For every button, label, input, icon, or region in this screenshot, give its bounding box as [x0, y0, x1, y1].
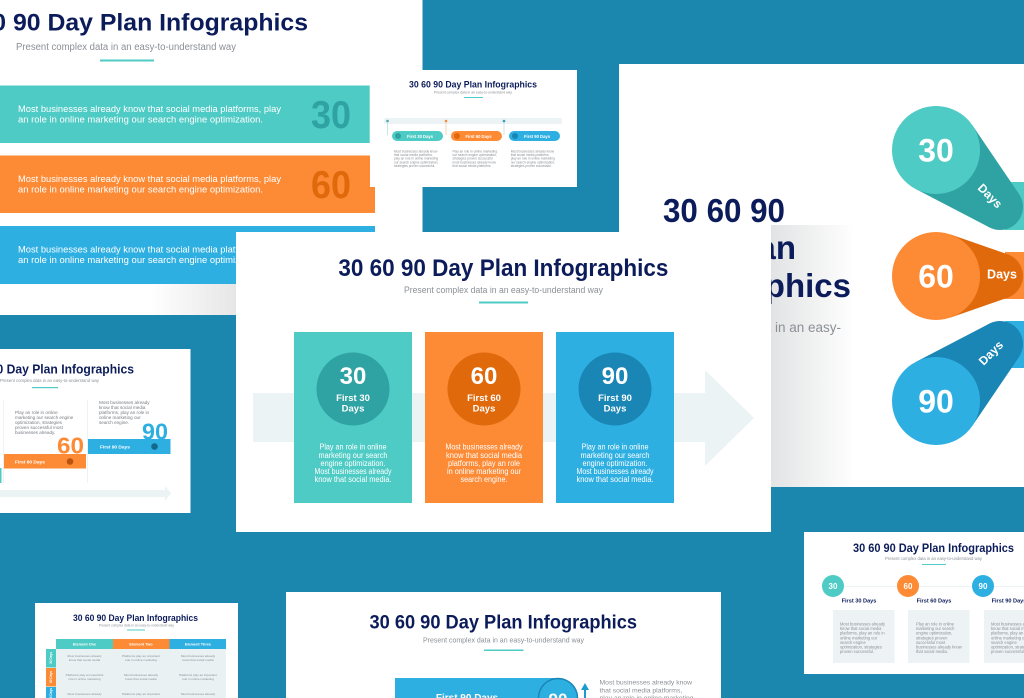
card: first 30 days: Play an role in online: [320, 442, 387, 452]
card: first 60 days: Most businesses already: [446, 442, 522, 452]
table cells: Most businesses already: [124, 673, 158, 677]
step: 60: 60: [904, 582, 913, 591]
table cells: Platforms play an important: [122, 692, 160, 696]
step: 30: [822, 575, 894, 663]
table cells: Platforms play an important: [66, 673, 103, 677]
text block: 90 column: search engine.: [99, 420, 129, 425]
text block: column 2: that social media platforms.: [452, 164, 491, 168]
heading: right slide title: [664, 198, 850, 304]
text block: 90 column: platforms, play an role in: [99, 410, 149, 415]
step: 60: marketing our search: [916, 626, 955, 631]
step: 60: First 60 Days: [917, 598, 951, 604]
step: first 60 days: 60: [57, 432, 84, 458]
subtitle: table slide: Present complex data in an easy-to-understand way: [99, 624, 174, 628]
card: first 90 days: know that social media.: [576, 475, 654, 484]
text block: column 3: our search engine optimization,: [511, 160, 555, 164]
panel: small timeline slide: [370, 70, 577, 187]
step: 90: 90: [979, 582, 988, 591]
bar: 90: an role in online marketing our search engine optimization.: [18, 255, 263, 266]
step: first 90 days: First 90 Days: [100, 444, 130, 450]
pill: first 90 days: First 90 Days: [524, 134, 551, 139]
bar: 30: 30: [311, 94, 351, 137]
panel: right slide with cylinders: [619, 64, 1024, 487]
step: first 60 days: [4, 432, 86, 468]
step: 60: engine optimization,: [916, 631, 952, 636]
text block: 90 column: Most businesses already: [99, 400, 150, 405]
cylinder: 90 days: Days: [976, 338, 1006, 368]
step: first 60 days: First 60 Days: [15, 460, 45, 466]
step: 90: proven successful.: [991, 649, 1024, 654]
icon: upward arrow: [581, 683, 589, 698]
table cells: know that social media: [69, 658, 100, 662]
card: first 60 days: 60: [471, 363, 497, 390]
pill: first 30 days: First 30 Days: [407, 134, 434, 139]
text block: 60 column: proven successful most: [15, 425, 64, 430]
card: first 30 days: marketing our search: [318, 451, 388, 460]
table cells: know that social media: [125, 677, 157, 681]
text block: bottom-centre description: [600, 680, 694, 698]
text block: column 1: our search engine optimization,: [394, 160, 438, 164]
card: first 30 days: engine optimization.: [320, 459, 386, 468]
text block: 60 column: marketing our search engine: [15, 415, 74, 420]
subtitle: top-left slide: Present complex data in an easy-to-understand way: [16, 42, 236, 53]
table cells: Most businesses already: [67, 692, 102, 696]
text block: column 2: strategies proven successful: [452, 157, 493, 161]
table header: Element One: [73, 642, 96, 646]
step: 30: 30: [829, 582, 838, 591]
pill: first 90 days: [509, 131, 560, 141]
step: 30: optimization, strategies: [840, 644, 882, 650]
text block: bottom-centre description: Most businesses already know: [600, 680, 692, 686]
text block: 90 column: know that social media: [99, 405, 146, 410]
text block: column 1: play an role in online marketing: [394, 157, 438, 161]
text block: bottom-centre description: that social media platforms,: [600, 688, 682, 694]
cylinder: 60 days: Days: [987, 268, 1017, 282]
text block: 60 column: optimization, strategies: [15, 420, 63, 425]
table body: [56, 649, 226, 698]
text block: column 3: [511, 149, 555, 168]
table cells: [66, 654, 217, 696]
subtitle: right slide: Present complex data in an easy-: [641, 320, 841, 335]
card: first 30 days: know that social media.: [314, 475, 392, 484]
text block: column 1: [394, 149, 438, 168]
pill: first 60 days: First 60 Days: [466, 134, 492, 139]
subtitle: small slide: Present complex data in an easy-to-understand way: [434, 90, 512, 94]
table cells: Most businesses already: [181, 654, 215, 658]
step: 30: know that social media: [840, 626, 882, 631]
table cells: Most businesses already: [181, 692, 215, 696]
step: 60: that social media.: [916, 649, 948, 654]
table side labels: 30 Days: [49, 652, 53, 664]
table cells: Platforms play an important: [179, 673, 217, 677]
arrow: left slide timeline: [0, 486, 171, 501]
card: first 90 days: marketing our search: [580, 451, 650, 460]
card: first 90 days: 90: [602, 363, 628, 390]
arrow: main background arrow: [253, 370, 754, 466]
bar: 30: Most businesses already know that social media platforms, play: [18, 104, 281, 115]
step: 30: search engine: [840, 640, 866, 645]
table cells: role in online marketing: [125, 658, 157, 662]
table cells: know that social media: [182, 658, 214, 662]
bar: 60: 60: [311, 164, 351, 207]
text block: column 2: most businesses already know: [452, 160, 497, 164]
table header: [56, 639, 226, 649]
card: first 90 days: engine optimization.: [582, 459, 648, 468]
card: first 30 days: [294, 332, 412, 503]
bar: 30: an role in online marketing our search engine optimization.: [18, 114, 263, 125]
card: first 60 days: Days: [473, 404, 495, 414]
step: 60: strategies proven: [916, 635, 948, 640]
card: first 30 days: First 30: [336, 393, 370, 404]
card: first 90 days: Days: [604, 404, 626, 414]
card: first 30 days: Days: [342, 404, 364, 414]
card: first 90 days: Most businesses already: [576, 467, 654, 476]
text block: column 2: [452, 149, 497, 168]
timeline band: [384, 97, 562, 135]
text block: column 1: that social media platforms,: [394, 153, 433, 157]
text block: column 3: Most businesses already know: [511, 149, 555, 153]
table side labels: 60 Days: [49, 671, 53, 683]
bar: 60: Most businesses already know that social media platforms, play: [18, 174, 281, 185]
step: 60: successful most: [916, 640, 946, 645]
table cells: role in online marketing: [68, 677, 101, 681]
cylinder: 60 days: 60: [918, 258, 954, 294]
text block: column 2: Play an role in online marketing: [452, 149, 497, 153]
bar: first 90 days: [395, 678, 578, 698]
card: first 30 days: Most businesses already: [314, 467, 392, 476]
card: first 60 days: First 60: [467, 393, 501, 404]
table side labels: [46, 649, 56, 698]
heading: small slide title: 30 60 90 Day Plan Infographics: [409, 80, 537, 90]
text block: column 3: play an role in online marketing: [511, 157, 555, 161]
subtitle: left slide: Present complex data in an easy-to-understand way: [0, 378, 100, 383]
cylinder: 30 days: 30: [918, 132, 954, 168]
text block: 60 column: [15, 410, 74, 435]
subtitle: main: Present complex data in an easy-to-understand way: [404, 285, 604, 295]
pill: first 60 days: [451, 131, 502, 141]
step: 90: search engine: [991, 640, 1017, 645]
card: first 90 days: Play an role in online: [582, 442, 649, 452]
cylinder: 30 days: Days: [975, 181, 1005, 211]
card: first 60 days: know that social media: [446, 451, 523, 460]
heading: main title: 30 60 90 Day Plan Infographics: [338, 255, 668, 282]
heading: bottom-right title: 30 60 90 Day Plan Infographics: [853, 542, 1014, 555]
step: 60: [897, 575, 970, 663]
bar: 30: [0, 86, 370, 143]
text block: 60 column: Play an role in online: [15, 410, 58, 415]
step: 30: platforms, play an role in: [840, 631, 885, 636]
card: first 90 days: First 90: [598, 393, 632, 404]
step: 60: Play an role in online: [916, 622, 955, 626]
panel: bottom-centre slide: [286, 592, 721, 698]
panel: bottom-left table slide: [35, 603, 238, 698]
panel: bottom-right slide: [804, 532, 1024, 674]
step: 30: First 30 Days: [842, 598, 876, 604]
bar: 60: an role in online marketing our search engine optimization.: [18, 184, 263, 196]
table cells: Most businesses already: [67, 654, 102, 658]
cylinder: 90 days: [892, 321, 1024, 445]
text block: 90 column: [99, 400, 150, 425]
panel: top-left slide with horizontal bars: [0, 0, 422, 315]
card: first 60 days: [425, 332, 543, 503]
heading: table slide title: 30 60 90 Day Plan Infographics: [73, 613, 198, 623]
step: 30: Most businesses already: [840, 622, 886, 626]
cylinder: 60 days: [892, 232, 1024, 320]
panel: main centre slide: [236, 232, 771, 532]
text block: column 1: Most businesses already know: [394, 149, 438, 153]
subtitle: bottom-right: Present complex data in an easy-to-understand way: [885, 556, 983, 561]
step: first 90 days: 90: [142, 418, 168, 444]
step: first 30 days fragment: [0, 468, 2, 483]
bar: 90: Most businesses already know that social media platforms, play: [18, 245, 281, 256]
card: first 60 days: platforms, play an role: [448, 459, 521, 468]
step: 30: online marketing our: [840, 635, 878, 640]
table header: Element Two: [129, 642, 153, 646]
table cells: Platforms play an important: [122, 654, 160, 658]
table header: Element Three: [185, 642, 211, 646]
heading: bottom-centre title: 30 60 90 Day Plan Infographics: [370, 612, 637, 634]
text block: 60 column: businesses already.: [15, 430, 55, 435]
panel: left slide with stepped bars: [0, 349, 190, 513]
subtitle: bottom-centre: Present complex data in an easy-to-understand way: [423, 636, 584, 644]
text block: 90 column: online marketing our: [99, 415, 141, 420]
card: first 60 days: in online marketing our: [447, 467, 521, 476]
text block: column 3: strategies proven successful.: [511, 164, 552, 168]
card: first 60 days: search engine.: [460, 475, 508, 484]
step: 30: proven successful.: [840, 649, 874, 654]
text block: column 2: our search engine optimization,: [452, 153, 497, 157]
step: 60: businesses already know: [916, 644, 962, 650]
step: first 90 days: [88, 418, 170, 454]
heading: right slide title: Infographics: [653, 267, 851, 304]
cylinder: 30 days: [892, 106, 1024, 230]
cylinder: 90 days: 90: [918, 384, 954, 420]
pill: first 30 days: [392, 131, 443, 141]
step: 90: [972, 575, 1024, 663]
text block: column 3: that social media platforms,: [511, 153, 550, 157]
heading: right slide title: 30 60 90: [663, 192, 785, 229]
bar: 60: [0, 156, 375, 213]
card: first 90 days: [556, 332, 674, 503]
table cells: role in online marketing: [182, 677, 214, 681]
heading: right slide title: Plan: [726, 229, 796, 266]
title underline: top-left slide: [100, 60, 154, 62]
card: first 30 days: 30: [340, 363, 366, 390]
text block: column 1: strategies proven successful.: [394, 164, 435, 168]
bar: 90: [0, 226, 375, 284]
